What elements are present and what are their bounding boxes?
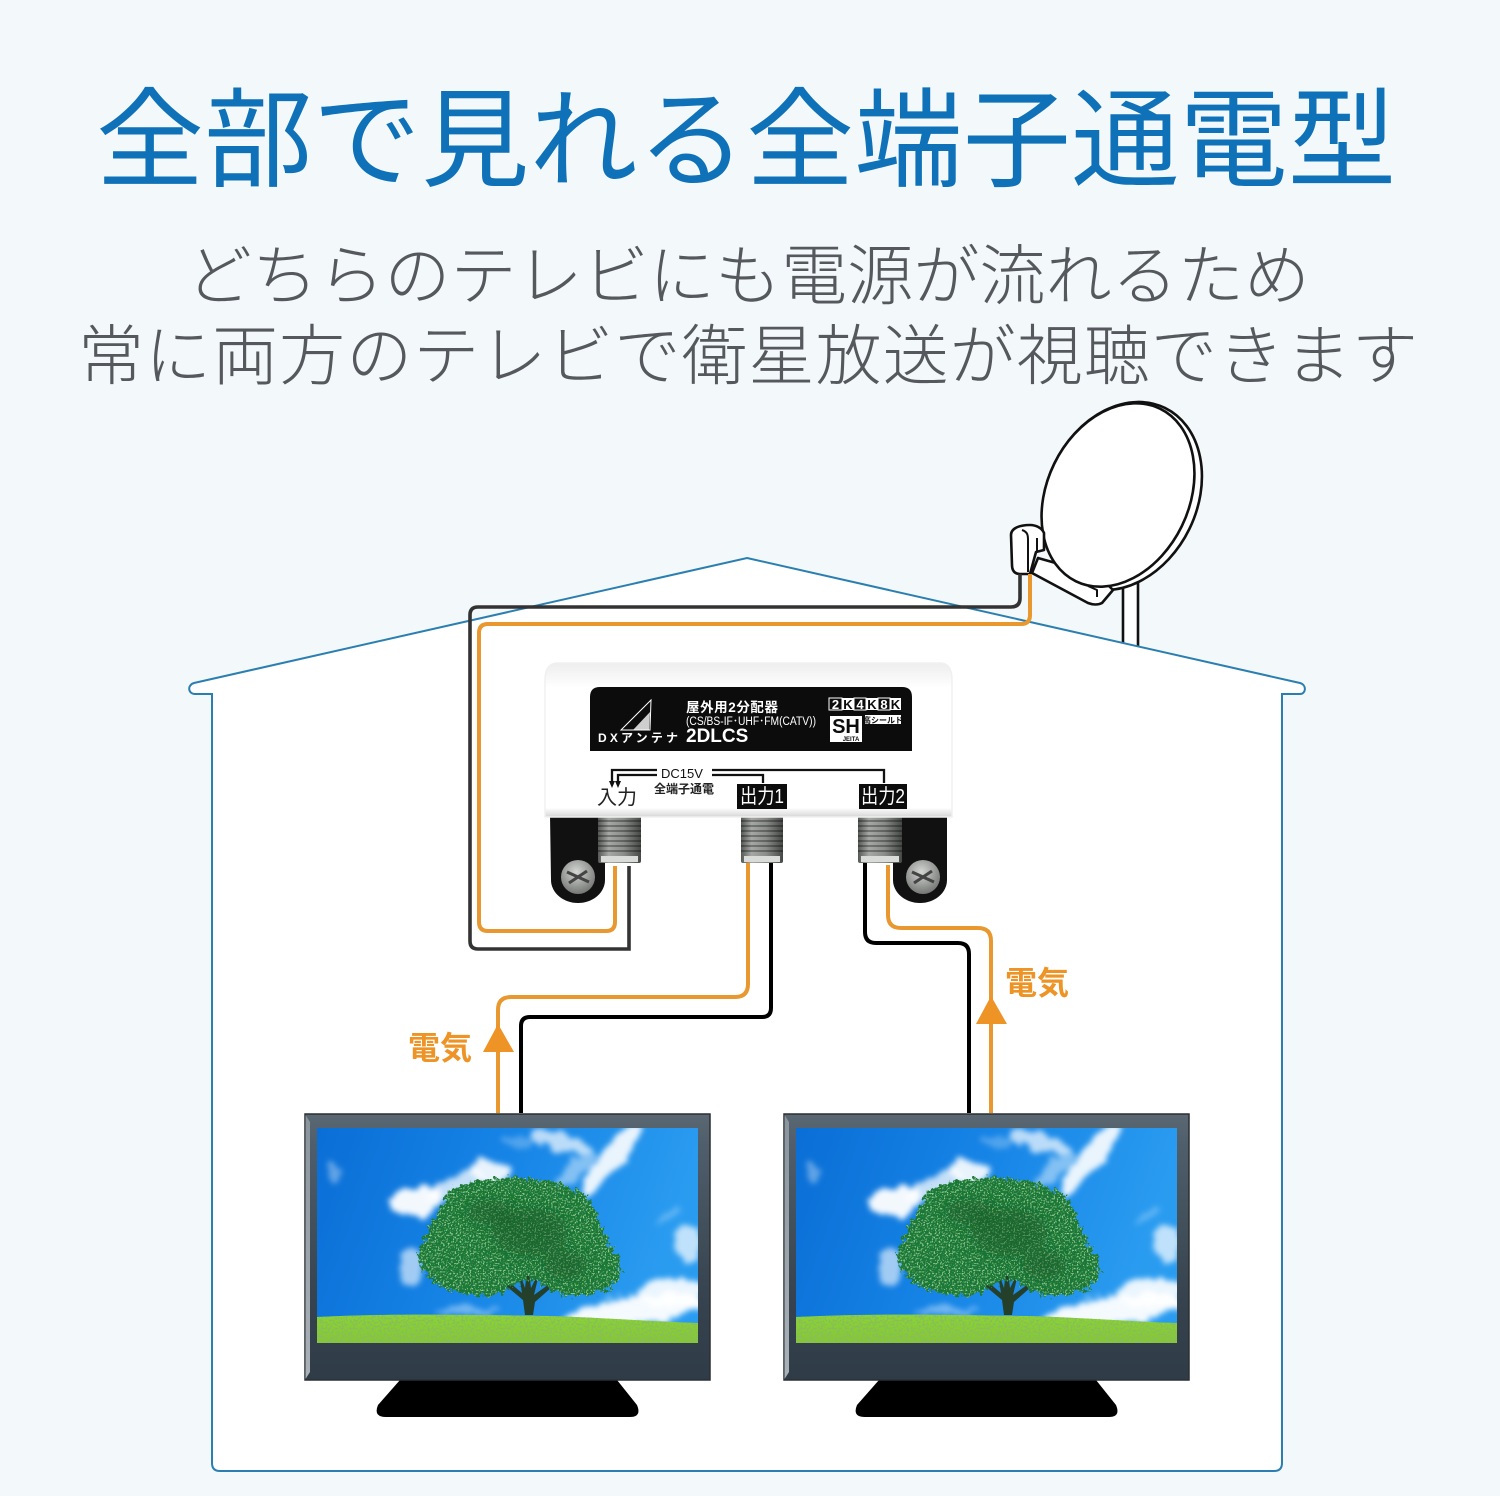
house outline [189, 558, 1305, 1471]
2K4K8K badge: K [867, 697, 877, 712]
2K4K8K badge [829, 697, 901, 712]
output 1 label: 出力1 [740, 785, 784, 808]
label: right electricity: 電気 [1005, 965, 1069, 1001]
dish arm [1032, 558, 1113, 604]
label: left electricity: 電気 [408, 1030, 472, 1066]
all terminal power text: 全端子通電 [654, 781, 714, 796]
connector input [598, 815, 641, 863]
DX antenna logo: DXアンテナ [598, 731, 678, 745]
black product label [590, 687, 912, 751]
TV left frame edge [306, 1115, 310, 1379]
power path lines [612, 770, 884, 785]
cable: output 1 orange [498, 862, 748, 1113]
splitter device [545, 663, 952, 903]
TV right screen image [796, 1117, 1185, 1343]
cable: output 2 black [865, 862, 969, 1113]
input label: 入力 [597, 786, 637, 809]
TV right frame [784, 1114, 1189, 1380]
cable: dish to splitter dark [470, 574, 1020, 949]
subtitle line 2: 常に両方のテレビで衛星放送が視聴できます [78, 319, 1418, 393]
2K4K8K badge: 8 [880, 697, 888, 712]
title: 全部で見れる全端子通電型 [96, 80, 1396, 201]
DC15V text: DC15V [661, 766, 703, 781]
SH badge: JEITA [843, 737, 860, 743]
TV right frame edge [784, 1115, 789, 1379]
SH badge: SH [832, 716, 860, 738]
cable: output 2 orange [888, 865, 991, 1113]
high shield badge: 高シールド [863, 715, 903, 725]
splitter body [545, 663, 952, 817]
arrow: left electricity [483, 1024, 514, 1052]
TV right [784, 1114, 1189, 1417]
product name text [686, 699, 816, 747]
product name text: (CS/BS-IF･UHF･FM(CATV)) [686, 716, 816, 728]
product name text: 屋外用2分配器 [686, 699, 778, 715]
TV left stand [377, 1380, 638, 1417]
2K4K8K badge: K [843, 697, 853, 712]
2K4K8K badge: K [891, 697, 901, 712]
TV left screen image [317, 1117, 706, 1343]
power arrowheads [609, 781, 621, 788]
left mounting bracket [550, 815, 605, 903]
LNB head [1011, 525, 1044, 574]
DX antenna logo [598, 700, 678, 745]
TV left [305, 1114, 710, 1417]
cable: dish to splitter orange [479, 574, 1030, 931]
dish arm inner edge [1088, 586, 1097, 597]
cable: output 1 black [521, 862, 771, 1113]
satellite dish [1011, 375, 1232, 652]
product name text: 2DLCS [686, 726, 748, 747]
subtitle line 1: どちらのテレビにも電源が流れるため [186, 239, 1310, 313]
subtitle text block [78, 239, 1418, 393]
dish face [1012, 378, 1224, 612]
output 2 label: 出力2 [861, 785, 905, 808]
TV left frame [305, 1114, 710, 1380]
connector output 1 [741, 815, 783, 863]
2K4K8K badge: 4 [856, 697, 864, 712]
dish back rim [1012, 375, 1232, 617]
TV right stand [856, 1380, 1117, 1417]
connector output 2 [858, 815, 902, 863]
arrow: right electricity [976, 996, 1007, 1024]
right mounting bracket [893, 815, 947, 903]
2K4K8K badge: 2 [832, 697, 839, 712]
dish pole [1123, 580, 1138, 652]
